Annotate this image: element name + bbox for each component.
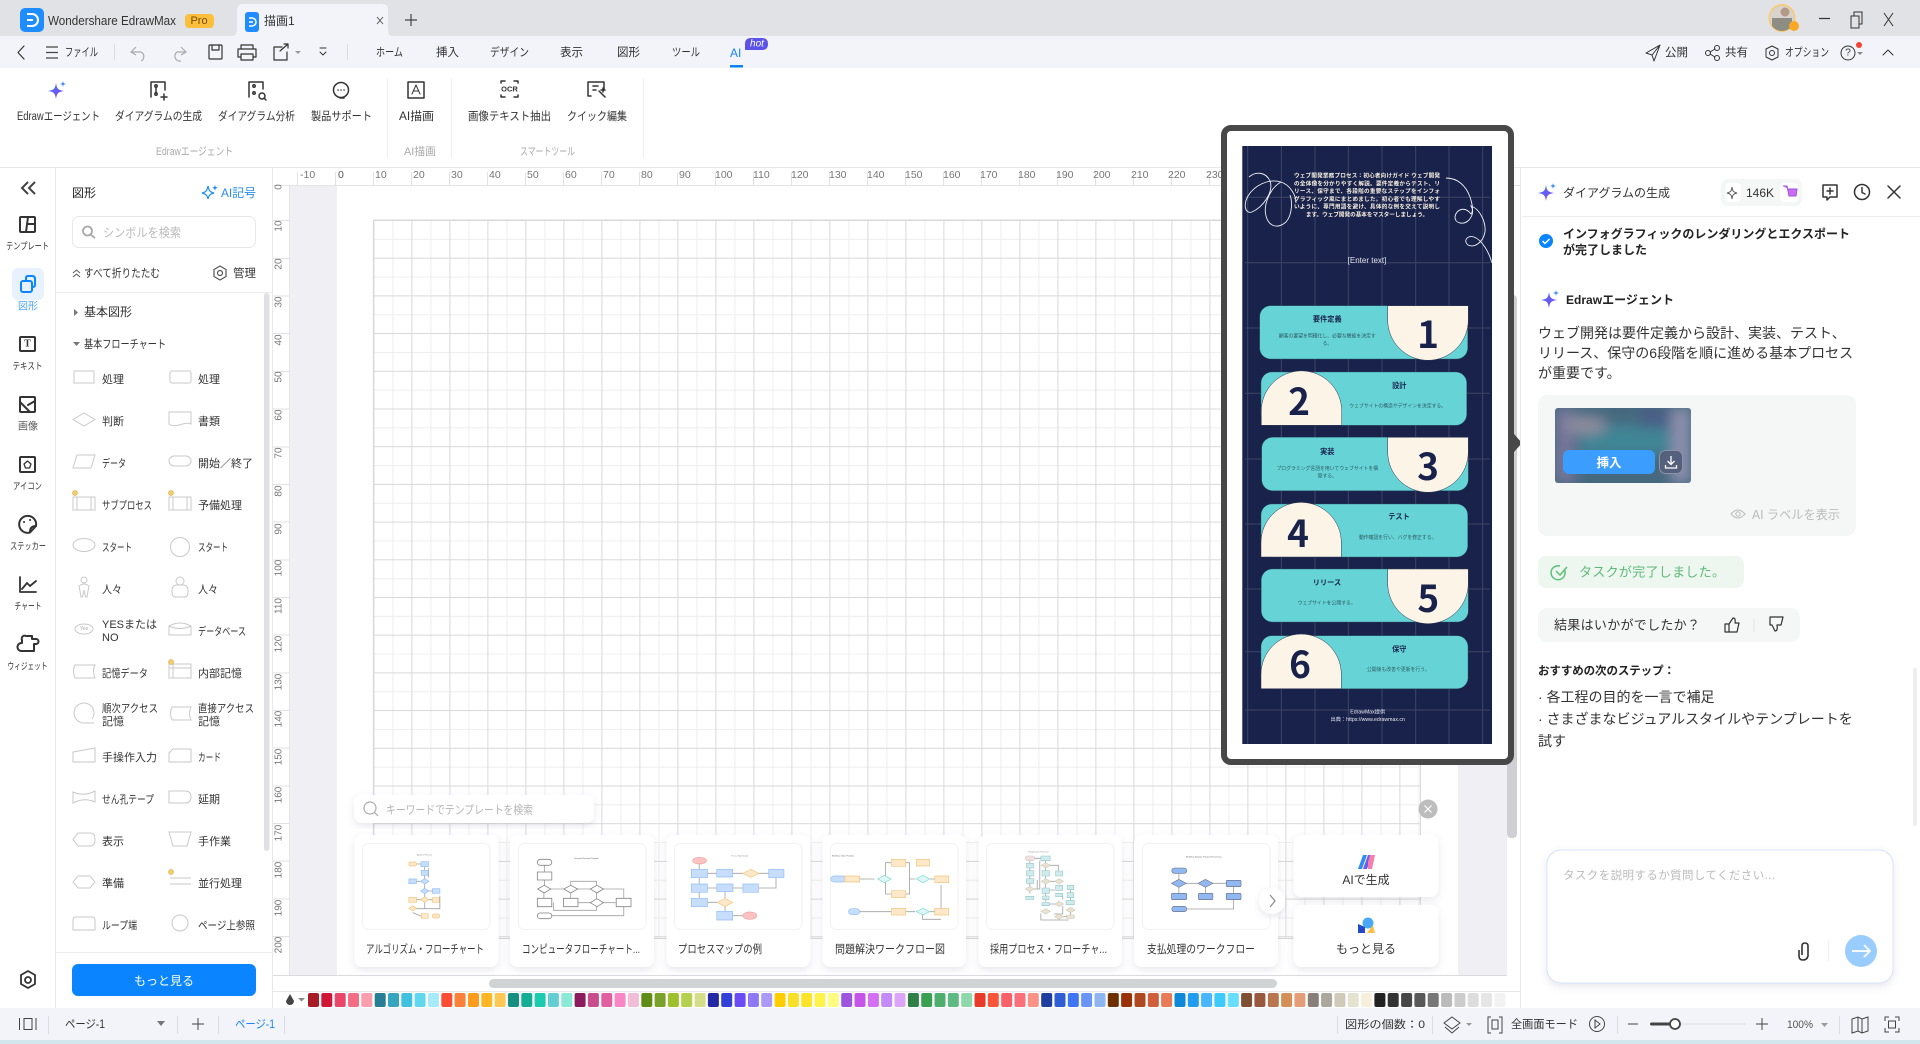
agent name: Edrawエージェント [1566,293,1674,307]
flowchart shape labels: 処理 [102,373,124,386]
attachment icon [1799,943,1808,960]
intro paragraph: ウェブ開発業務プロセス：初心者向けガイド ウェブ開発 [1294,172,1440,180]
step 5 [1261,569,1468,624]
panel header: ダイアグラムの生成 [1563,185,1670,200]
menu tabs: 表示 [560,46,583,59]
step 1: 要件定義 [1313,314,1342,324]
step 2 [1261,371,1467,426]
step 2: ウェブサイトの構造やデザインを決定する。 [1349,402,1446,410]
thumbnail: computer flowchart [537,857,631,919]
template card: process map [666,835,810,967]
color palette bar [273,992,1520,1008]
vertical ruler: 190 [274,899,284,916]
horizontal ruler: 0 [338,169,344,181]
canvas background [273,168,1520,992]
ribbon labels [17,109,627,123]
vertical ruler: 50 [274,371,284,383]
step 5: リリース [1313,578,1341,587]
insert button: 挿入 [1596,455,1622,470]
flowchart shape labels: カード [198,751,221,764]
collapse icon [22,182,35,194]
template card: payment workflow [1134,835,1278,967]
flowchart shape labels: ループ端 [102,919,137,932]
intro paragraph [1294,172,1440,218]
ribbon labels: AI描画 [399,109,434,123]
fullscreen mode: 全画面モード [1511,1017,1578,1031]
vertical ruler: 180 [274,861,284,878]
thumbnail: payment workflow [1171,856,1241,912]
right actions [1646,42,1893,61]
file menu [46,47,98,59]
vertical ruler: 160 [274,786,284,803]
thumbnail: process map [691,855,784,920]
drawing page [337,186,1458,975]
thumbnail: algorithm flowchart [409,854,440,918]
icon: templates: テンプレート [6,242,49,252]
hot badge [745,38,768,50]
chat input [1547,850,1893,983]
active document tab: 描画1 [264,14,295,28]
icon: text: テキスト [12,362,42,372]
horizontal ruler: 60 [565,169,577,181]
flowchart shape labels: 記憶 [102,715,124,728]
icon: text: T [24,338,31,350]
flowchart shape labels: 記憶 [198,715,220,728]
horizontal ruler: 50 [527,169,539,181]
icon: shapes active: 図形 [18,300,38,312]
template card: problem solving: 問題解決ワークフロー図 [835,942,945,956]
horizontal ruler: 190 [1056,169,1074,181]
template search bar: キーワードでテンプレートを検索 [386,803,533,817]
ribbon labels: ダイアグラム分析 [218,109,295,123]
step 2: 2 [1288,372,1310,426]
horizontal ruler: 90 [679,169,691,181]
ribbon labels: ダイアグラムの生成 [115,109,202,123]
page selector: ページ-1 [65,1019,105,1031]
flowchart shape labels: 判断 [102,415,124,428]
flowchart shape labels: 書類 [198,414,220,428]
icon: text [12,337,42,372]
page selector [65,1019,165,1031]
task complete badge [1538,556,1744,588]
step 3: 築する。 [1318,472,1337,480]
flowchart shape labels: 人々 [102,583,122,596]
search box [72,216,256,248]
horizontal ruler: 140 [867,169,885,181]
ribbon group labels: Edrawエージェント [156,146,233,158]
layers icon [1444,1017,1472,1033]
horizontal ruler: 30 [451,169,463,181]
step 3 [1262,437,1468,492]
manage: 管理 [233,266,256,280]
infographic footer: EdrawMax提供 [1350,708,1385,716]
step 3: 3 [1417,437,1439,491]
horizontal ruler: 160 [943,169,961,181]
intro paragraph: リース、保守まで、各段階の重要なステップをインフォ [1294,187,1440,195]
panel scrollbar [1913,668,1917,826]
add page [192,1018,204,1030]
ribbon labels: クイック編集 [567,109,627,123]
result card [1538,395,1856,536]
icon: icon [13,457,42,492]
step 3: プログラミング言語を用いてウェブサイトを構 [1277,465,1378,472]
step 3: 実装 [1320,447,1334,456]
summary text [1538,325,1853,381]
chat input: タスクを説明するか質問してください... [1563,868,1775,882]
collapse all [73,266,160,280]
vertical ruler: 10 [274,220,284,232]
step 2: 設計 [1392,381,1407,390]
page grid [373,220,1420,938]
flowchart shape labels: スタート [198,541,228,554]
horizontal ruler: 200 [1093,169,1111,181]
summary text: が重要です。 [1538,365,1621,381]
carousel next button [1259,888,1285,914]
vertical ruler: 170 [274,824,284,841]
thumbnail: algorithm flowchart: Algorithm Flowchart [417,854,432,857]
vertical ruler: 120 [274,635,284,652]
horizontal ruler: 130 [829,169,847,181]
horizontal ruler: 120 [791,169,809,181]
current page tab: ページ-1 [235,1019,275,1031]
ribbon group labels: AI描画 [404,144,436,158]
generate with AI card [1294,835,1438,897]
user avatar [1768,4,1799,32]
right actions: 公開 [1665,46,1688,59]
flowchart shape labels: 順次アクセス [102,702,158,715]
horizontal ruler: 10 [375,169,387,181]
canvas scrollbars [1507,295,1517,838]
horizontal ruler: 150 [905,169,923,181]
hot badge: hot [750,38,765,50]
flowchart shape labels: サブプロセス [102,498,152,512]
flowchart shape labels: データベース [198,624,246,638]
flowchart shape labels: 準備 [102,876,124,890]
menu toolbar [0,36,1920,68]
menu tabs: 図形 [617,46,640,59]
icon: settings [21,971,35,988]
step 6: 6 [1289,635,1311,689]
ribbon icons [48,81,605,100]
flowchart shape icons [72,371,191,931]
template card: algorithm flowchart: アルゴリズム・フローチャート [366,942,484,956]
vertical ruler: 130 [274,673,284,690]
vertical ruler: 40 [274,334,284,346]
step 1: る。 [1322,341,1332,347]
window controls [1819,12,1893,28]
status message: インフォグラフィックのレンダリングとエクスポート [1563,226,1850,241]
blurred preview [1555,408,1691,483]
vertical ruler: 70 [274,447,284,459]
flowchart shape labels: 開始／終了 [198,456,253,470]
step 5: 5 [1417,569,1439,623]
basic shapes section: 基本図形 [84,305,132,319]
vertical ruler: 140 [274,710,284,727]
feedback prompt [1538,608,1800,642]
infographic grid lines [1245,146,1490,744]
color swatches [308,993,1505,1007]
AI symbol link: AI記号 [221,186,256,200]
infographic background [1242,146,1492,744]
step 1: 顧客の要望を明確化し、必要な機能を決定す [1279,332,1376,340]
thumbnail: payment workflow: Workflow Diagram: Payment Processing [1186,856,1221,859]
vertical ruler: 60 [274,409,284,421]
horizontal ruler: 70 [603,169,615,181]
horizontal ruler [273,168,1520,186]
zoom level [1787,1019,1828,1031]
menu tabs: ツール [672,47,700,59]
step 4: 4 [1287,504,1309,558]
feedback prompt: 結果はいかがでしたか？ [1554,618,1700,632]
icon: image: 画像 [18,420,38,432]
ribbon labels: 画像テキスト抽出 [468,109,551,123]
template search bar [354,795,594,823]
step 6 [1261,634,1468,689]
pro badge: Pro [190,15,208,27]
flowchart shape labels: 直接アクセス [198,702,254,715]
summary text: ウェブ開発は要件定義から設計、実装、テスト、 [1538,325,1846,341]
active document tab [232,4,393,36]
fullscreen mode [1488,1017,1578,1033]
file menu: ファイル [65,47,98,59]
icon: templates [6,217,49,252]
template card: process map: プロセスマップの例 [678,942,762,956]
step 4 [1261,502,1468,558]
vertical ruler: 20 [274,258,284,270]
next steps list: 試す [1538,733,1566,749]
vertical ruler: 0 [274,184,284,190]
decorative swirl left [1245,173,1296,226]
thumbnail: computer flowchart: Computer Flowchart Template [574,857,599,860]
flowchart shape labels: 手作業 [198,834,231,848]
panel heading: 図形 [72,186,96,200]
infographic preview popup [1224,128,1522,762]
horizontal ruler: 20 [413,169,425,181]
flowchart shape labels: 表示 [102,835,124,848]
see more card: もっと見る [1336,942,1396,956]
shapes panel [56,168,272,1008]
zoom slider [1628,1018,1768,1030]
panel header [1538,179,1900,206]
thumbnail: hiring process [1025,850,1075,920]
play button [1590,1016,1604,1032]
menu tabs: AI [730,46,741,60]
pro badge [185,14,214,28]
feedback history close icons [1823,184,1900,200]
flowchart shape labels: 延期 [198,793,220,806]
download button [1660,450,1682,474]
AI label toggle: AI ラベルを表示 [1752,508,1840,522]
step 4: 動作確認を行い、バグを修正する。 [1359,534,1436,541]
flowchart shape labels: せん孔テープ [102,793,154,806]
template card: hiring process [978,835,1122,967]
icon: sticker [10,516,46,552]
popup frame [1224,128,1522,762]
title bar [0,0,1920,36]
template card: problem solving [822,835,966,967]
collapse all: すべて折りたたむ [84,266,160,280]
flowchart shape labels: 予備処理 [198,499,242,512]
next steps list [1538,689,1853,749]
new tab button [405,14,417,26]
thumbnail: problem solving workflow: Workflow: Solve Problem [832,856,855,858]
ribbon icons: OCR [501,84,518,94]
flowchart shape labels: NO [102,632,119,644]
AI assistant panel [1520,168,1920,1008]
flowchart shape labels: 処理 [198,373,220,386]
flowchart shape labels: 手操作入力 [102,750,157,764]
generate with AI card: AIで生成 [1342,873,1390,887]
vertical ruler: 150 [274,748,284,765]
horizontal ruler: 100 [715,169,733,181]
panel scrollbar [264,293,270,851]
ribbon group labels [156,144,575,158]
horizontal ruler: 110 [753,169,770,181]
template card: algorithm flowchart [354,835,498,967]
decorative swirl right [1446,178,1492,263]
horizontal ruler: 230 [1206,169,1224,181]
zoom level: 100% [1787,1019,1813,1031]
next steps list: · 各工程の目的を一言で補足 [1538,689,1715,705]
template card: hiring process: 採用プロセス・フローチャ... [990,943,1107,956]
credits badge: 146K [1746,186,1774,200]
horizontal ruler: 80 [641,169,653,181]
close gallery button [1418,800,1438,818]
status message [1539,226,1850,257]
icon: widget: ウィジェット [8,662,48,672]
step 6: 公開後も改善や更新を行う。 [1367,666,1430,673]
flowchart shape labels: 記憶データ [102,666,148,680]
map and focus icons [1852,1017,1899,1033]
vertical ruler: 80 [274,485,284,497]
next steps heading: おすすめの次のステップ： [1538,664,1675,678]
menu tabs: ホーム [376,46,403,59]
ribbon labels: 製品サポート [311,109,372,123]
horizontal ruler: 210 [1131,169,1149,181]
horizontal ruler: 40 [489,169,501,181]
insert button [1563,450,1655,474]
template thumbnails left [408,854,784,920]
flowchart shape labels: 並行処理 [198,876,242,890]
thumbnail: process map: Process Map Example [731,855,748,858]
icon: widget [8,636,48,672]
vertical ruler: 30 [274,296,284,308]
ribbon [0,68,1920,168]
menu tabs [376,38,768,68]
icon: shapes active [12,268,44,312]
horizontal ruler: 180 [1018,169,1036,181]
right actions: ? [1845,48,1851,58]
vertical ruler: 100 [274,559,284,576]
template gallery [354,795,1438,967]
menu tabs: デザイン [490,45,529,59]
more button: もっと見る [134,974,194,988]
icon: icon: アイコン [13,482,42,492]
see more card [1294,905,1438,967]
template card: payment workflow: 支払処理のワークフロー [1147,942,1255,956]
thumbs icons [1725,617,1783,632]
search box: シンボルを検索 [103,226,181,240]
shape count: 図形の個数：0 [1345,1018,1425,1031]
thumbnail: hiring process: Hiring Process Flowchart [1028,850,1049,853]
basic flowchart section: 基本フローチャート [84,337,166,351]
step 6: 保守 [1392,644,1406,654]
AI symbol link [202,185,256,200]
placeholder text: [Enter text] [1348,256,1386,265]
flowchart shape labels: データ [102,456,126,470]
template card: computer flowchart [510,835,654,967]
infographic footer: 出典：https://www.edrawmax.cn [1331,715,1405,723]
icon: sticker: ステッカー [10,542,46,552]
thumbnail: problem solving workflow [831,856,949,919]
horizontal ruler: 220 [1168,169,1186,181]
icon: chart [14,577,42,612]
intro paragraph: グラフィック風にまとめました。初心者でも理解しやす [1294,195,1440,203]
flowchart shape labels: スタート [102,541,132,554]
status message: が完了しました [1563,242,1647,257]
flowchart shape labels: ページ上参照 [198,919,255,932]
more button [72,964,256,996]
app logo [20,8,44,32]
back arrow [18,46,24,59]
icon: image [18,397,38,432]
step 1 [1260,305,1468,360]
menu tabs: 挿入 [436,45,459,59]
summary text: リリース、保守の6段階を順に進める基本プロセス [1538,345,1853,361]
left icon sidebar [0,168,56,1008]
template card: computer flowchart: コンピュータフローチャート... [522,943,640,956]
flowchart shape labels [102,373,255,932]
basic flowchart section [73,337,166,351]
step 4: テスト [1388,512,1410,521]
horizontal ruler: 170 [980,169,998,181]
right actions: オプション [1785,46,1829,59]
send button [1845,935,1877,967]
page panel toggle [20,1018,36,1030]
intro paragraph: いように、専門用語を避け、具体的な例を交えて説明し [1294,203,1440,211]
credits badge [1721,179,1802,206]
flowchart shape icons: Yes [80,626,89,632]
vertical ruler [273,184,290,975]
vertical ruler: 90 [274,523,284,535]
app name: Wondershare EdrawMax [48,14,177,28]
ribbon labels: Edrawエージェント [17,111,100,123]
manage [214,266,256,280]
flowchart shape labels: 人々 [198,583,218,596]
right actions: 共有 [1725,45,1748,59]
step 5: ウェブサイトを公開する。 [1298,600,1356,606]
icon: fill color [286,994,305,1005]
status bar [0,1008,1920,1044]
horizontal ruler: -10 [300,169,315,181]
vertical ruler: 110 [274,598,284,614]
infographic footer [1331,708,1405,723]
vertical ruler: 200 [274,936,284,953]
intro paragraph: ます。ウェブ開発の基本をマスターしましょう。 [1306,210,1428,218]
flowchart shape labels: 内部記憶 [198,666,242,680]
task complete badge: タスクが完了しました。 [1579,564,1725,580]
template thumbnails right [830,850,1242,920]
icon: chart: チャート [14,602,42,612]
agent name [1541,290,1674,308]
quick access icons [131,44,326,61]
ribbon group labels: スマートツール [520,146,575,158]
next steps list: · さまざまなビジュアルスタイルやテンプレートを [1538,711,1853,727]
intro paragraph: の全体像を分かりやすく解説。要件定義からテスト、リ [1294,179,1440,187]
flowchart shape labels: YESまたは [102,618,157,631]
step 1: 1 [1417,305,1439,359]
